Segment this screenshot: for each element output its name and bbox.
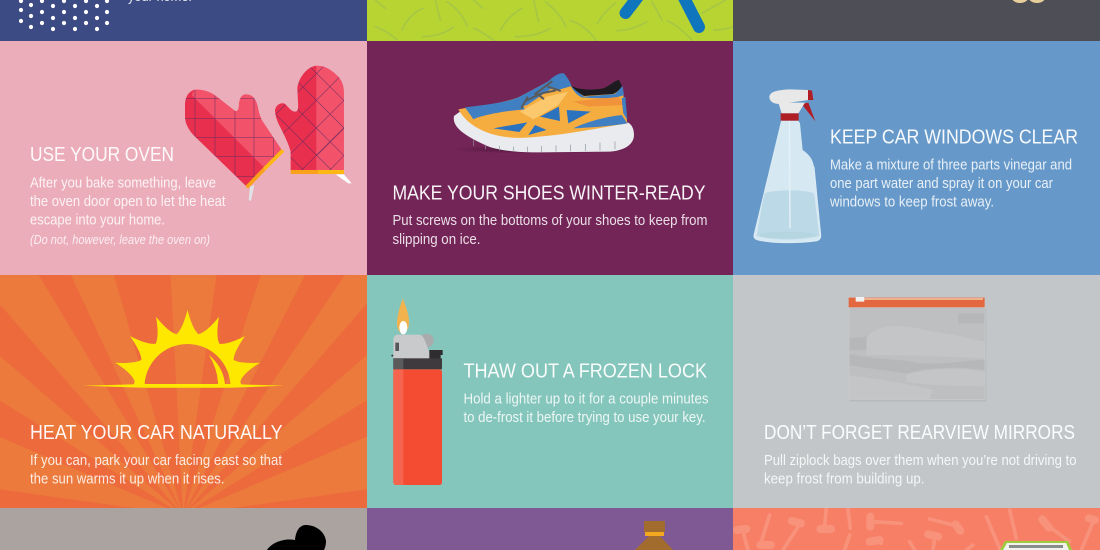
panel: purple bottom fragment <box>367 508 733 550</box>
body text <box>764 453 1076 488</box>
plunger pattern <box>737 508 1095 550</box>
heading: MAKE YOUR SHOES WINTER-READY <box>392 182 706 204</box>
panel: frozen lock <box>367 275 733 508</box>
heading: USE YOUR OVEN <box>30 143 174 166</box>
heading: THAW OUT A FROZEN LOCK <box>464 360 707 382</box>
body text <box>829 158 1072 210</box>
body text: escape into your home. <box>30 212 165 228</box>
body text: Pull ziplock bags over them when you’re not driving to <box>764 453 1076 469</box>
body text: Make a mixture of three parts vinegar and <box>830 158 1072 174</box>
body text: Hold a lighter up to it for a couple minutes <box>464 392 708 408</box>
icon: lighter <box>391 298 443 485</box>
panel: grey bottom fragment <box>0 508 367 550</box>
panel: heat your car <box>0 275 367 508</box>
panel: use your oven <box>0 33 367 275</box>
icon: black silhouette <box>267 525 326 550</box>
body text: to de-frost it before trying to use your key. <box>464 410 706 426</box>
body text <box>464 392 708 426</box>
body text <box>392 213 708 248</box>
body text: If you can, park your car facing east so that <box>30 453 282 469</box>
panel: shoes <box>367 41 733 275</box>
body text: Put screws on the bottoms of your shoes to keep from <box>392 213 708 229</box>
body text: the oven door open to let the heat <box>30 194 226 210</box>
icon: brown bottle <box>635 521 673 550</box>
icon: running shoe <box>448 73 638 154</box>
body text <box>30 453 282 488</box>
body text: (Do not, however, leave the oven on) <box>30 233 210 247</box>
body text: slipping on ice. <box>392 232 480 248</box>
panel: dark top fragment <box>733 0 1100 41</box>
body text: After you bake something, leave <box>30 176 216 192</box>
panel: green top fragment <box>367 0 734 41</box>
panel: navy top fragment <box>0 0 367 41</box>
panel: car windows <box>733 41 1100 275</box>
right mitt <box>275 66 352 184</box>
icon: rising sun <box>83 310 284 388</box>
body text: windows to keep frost away. <box>829 194 994 210</box>
panel: rearview mirrors <box>733 275 1100 508</box>
body text: keep frost from building up. <box>764 472 924 488</box>
icon: oven mitts <box>185 66 352 201</box>
icon: green box <box>1000 541 1072 550</box>
body text: one part water and spray it on your car <box>830 176 1053 192</box>
sunburst rays <box>0 275 367 508</box>
left mitt <box>185 90 284 201</box>
dot pattern <box>19 0 109 31</box>
panel: salmon bottom fragment <box>733 508 1100 550</box>
heading: HEAT YOUR CAR NATURALLY <box>30 421 283 444</box>
icon: ziplock bag <box>849 297 986 401</box>
icon: spray bottle <box>754 89 821 243</box>
icon: cut-off tan shapes <box>1012 0 1045 3</box>
background squiggles <box>375 0 734 41</box>
body text: the sun warms it up when it rises. <box>30 472 224 488</box>
icon: blue straps <box>626 0 699 27</box>
body text <box>30 176 226 247</box>
